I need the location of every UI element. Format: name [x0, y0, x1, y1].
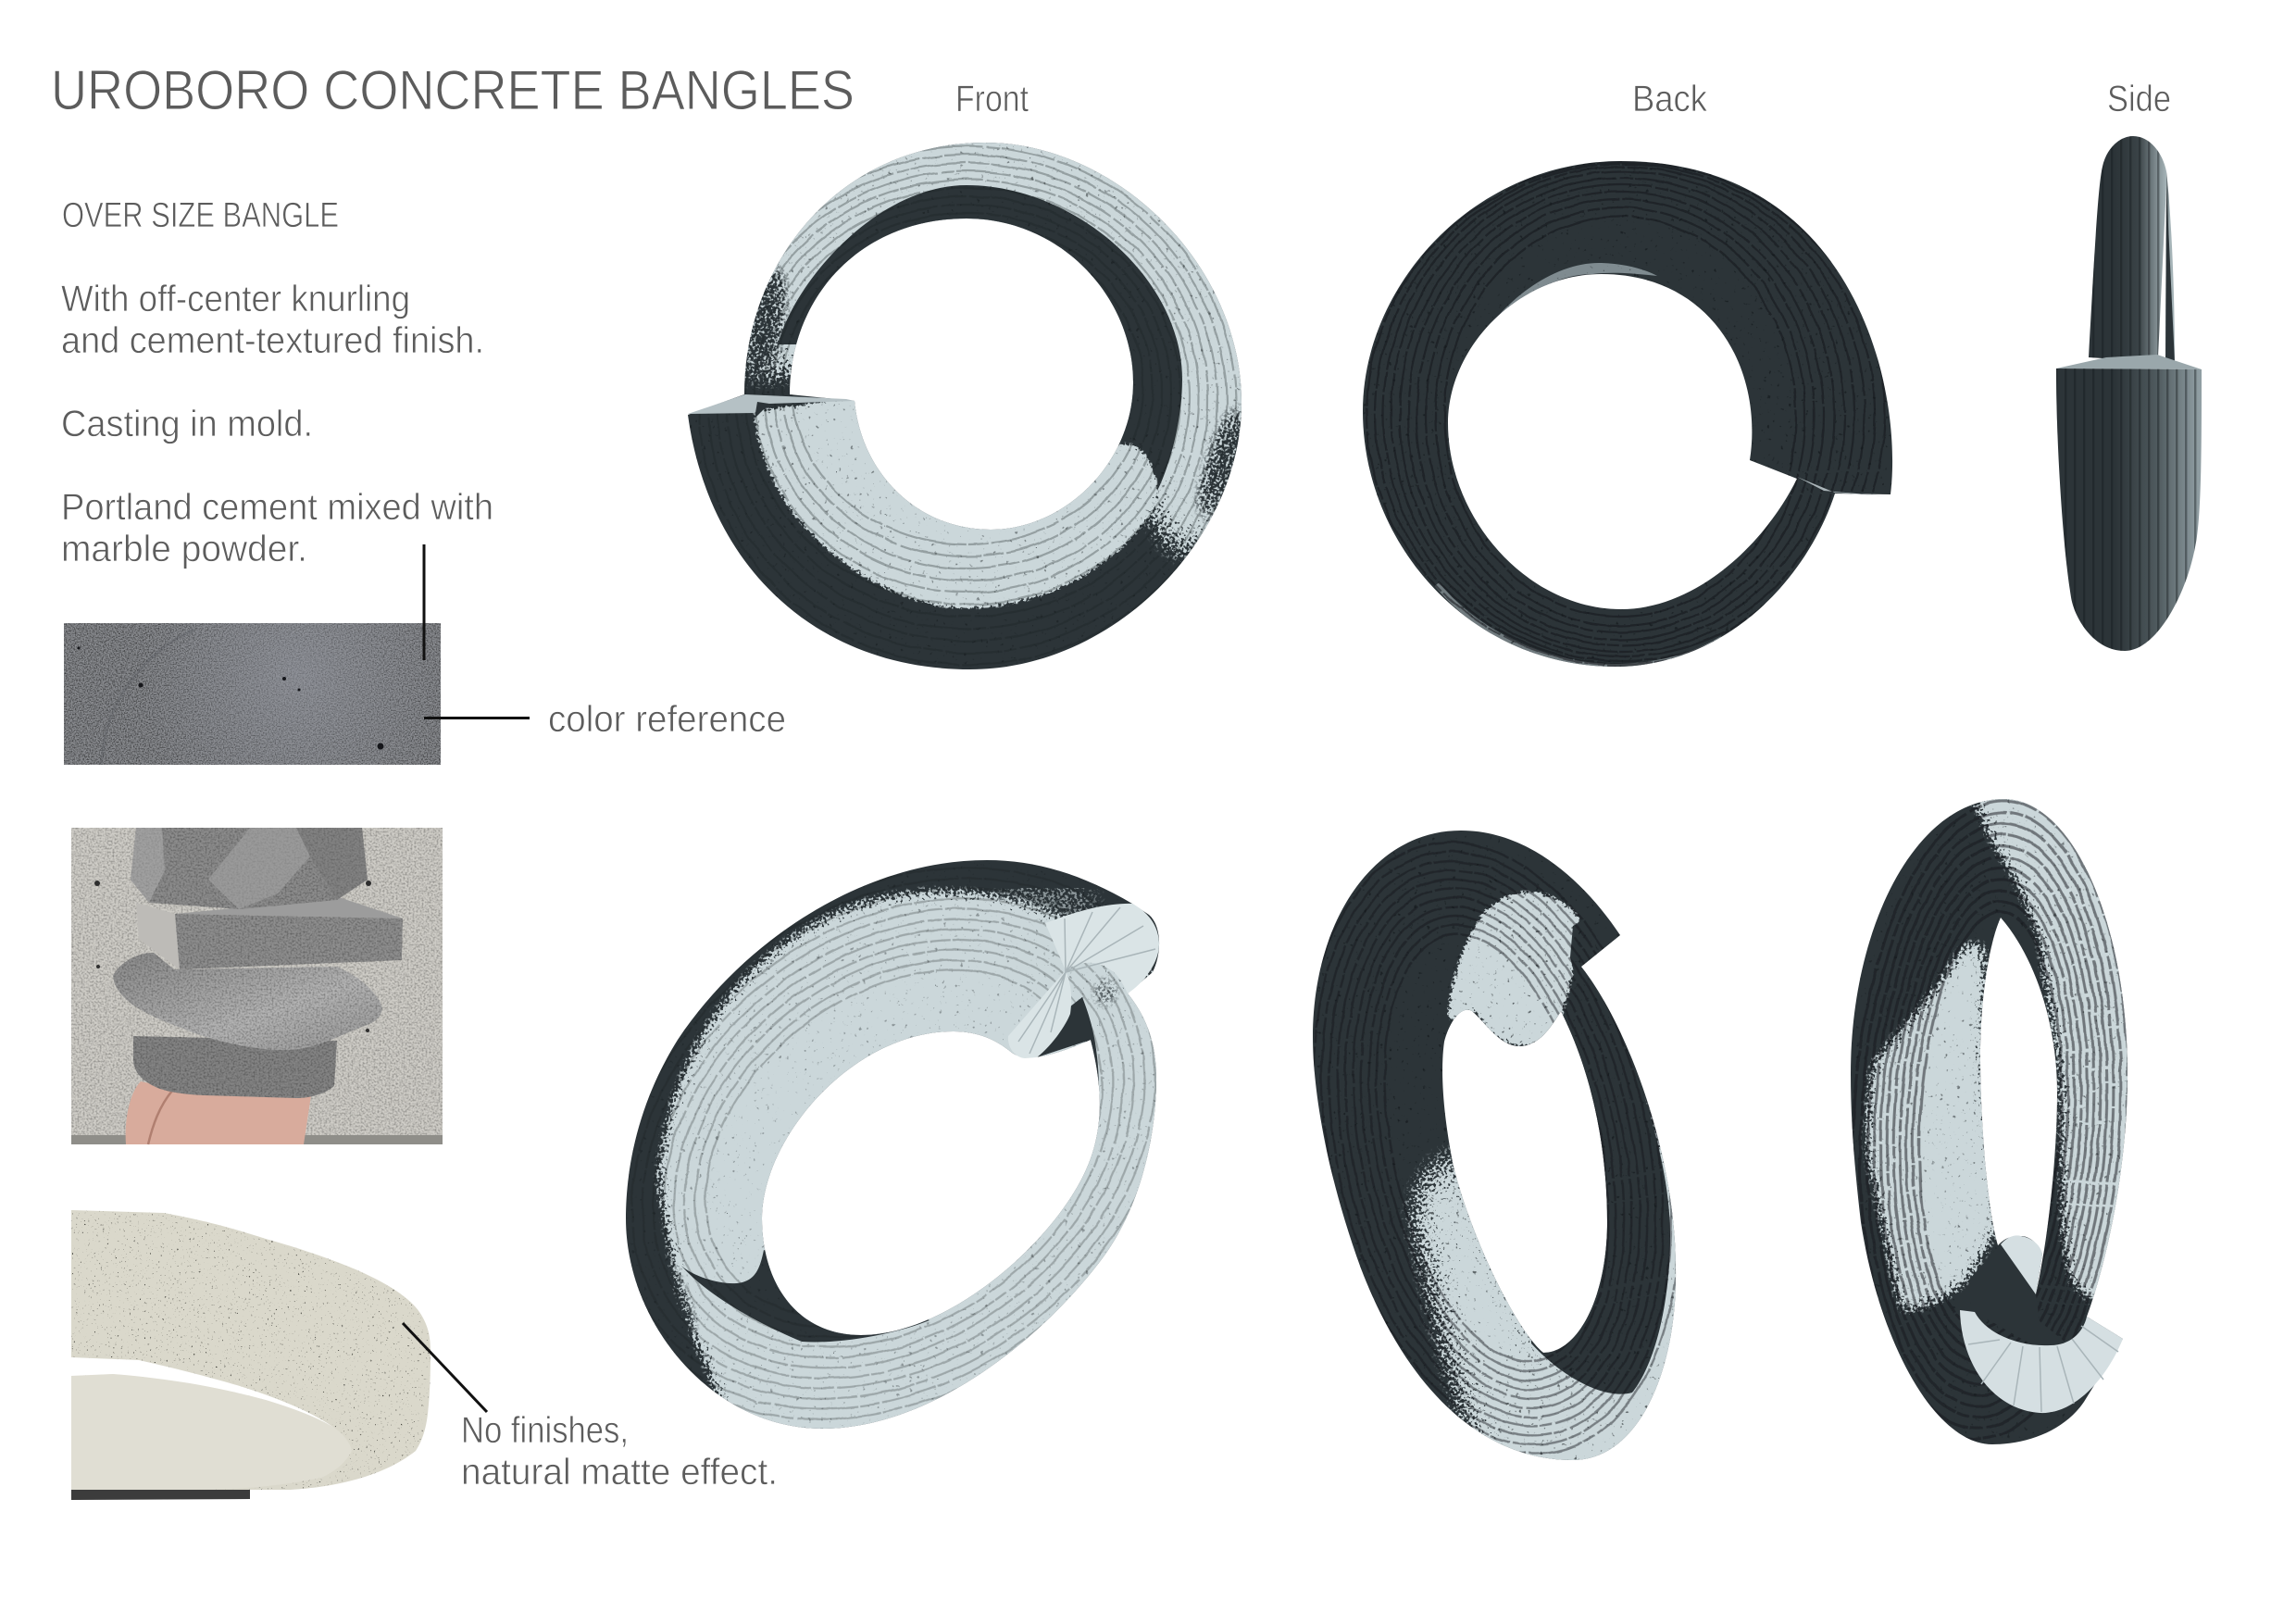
wall pores: [94, 881, 371, 1032]
soft mottling: [64, 623, 441, 765]
mold arc: [102, 630, 194, 765]
fan lines: [1018, 907, 1155, 1054]
fan cap upper: [1045, 904, 1159, 993]
right dark band: [2165, 185, 2175, 363]
fan lines: [1968, 1326, 2118, 1412]
material line 1: Portland cement mixed with: [61, 487, 493, 528]
cap notch: [755, 402, 769, 418]
bangle: perspective 1: [626, 860, 1159, 1429]
square bangle top: [175, 898, 403, 918]
hand: [126, 1081, 311, 1144]
bangle: front view: [688, 143, 1242, 669]
material line 2: marble powder.: [61, 529, 307, 569]
pores: [78, 646, 383, 750]
photo: concrete bangles on wrist: [71, 828, 443, 1144]
fin knurling: [2089, 136, 2175, 363]
faceted bangle facets: [131, 828, 368, 909]
lower bangle: [133, 1036, 337, 1098]
square bangle front: [175, 914, 403, 969]
vertical knurling: [2056, 369, 2202, 651]
text block: product description: [61, 196, 493, 569]
square bangle side: [136, 903, 180, 969]
fan cap upper: [2001, 1235, 2042, 1294]
color reference swatch: [64, 544, 786, 765]
Front label: Front: [955, 79, 1029, 119]
black base: [71, 1489, 250, 1500]
leader line horizontal: [424, 717, 530, 719]
outer surface: [71, 1210, 430, 1490]
photo: natural matte bangle: [71, 1210, 778, 1500]
title: UROBORO CONCRETE BANGLES: [51, 59, 855, 121]
dark inner edge: [1081, 997, 1099, 1086]
bangle: back view: [1363, 161, 1892, 667]
dark wedge: [1037, 997, 1091, 1057]
inner surface: [71, 1374, 352, 1490]
concrete texture: [64, 623, 441, 765]
cut cap: [688, 394, 855, 414]
Side label: Side: [2107, 79, 2171, 119]
Back label: Back: [1632, 79, 1708, 119]
gap under band: [71, 1357, 334, 1428]
leader line: [403, 1323, 487, 1412]
bangle: perspective 3: [1851, 799, 2128, 1444]
fan cap lower: [1008, 970, 1071, 1058]
lower body: [2056, 369, 2202, 651]
slit: [2158, 185, 2166, 357]
bangle: perspective 2: [1313, 831, 1676, 1460]
leader line vertical: [422, 544, 426, 660]
thumb crease: [148, 1091, 172, 1144]
label: no finishes: No finishes,: [461, 1410, 629, 1451]
casting: Casting in mold.: [61, 404, 313, 444]
cut cap: [1797, 477, 1889, 496]
saucer bangle: [113, 953, 382, 1050]
cut cap: [2056, 355, 2202, 369]
label: natural matte: natural matte effect.: [461, 1452, 778, 1493]
fan cap lower: [1960, 1310, 2123, 1413]
dark fan: [1968, 1252, 2065, 1345]
view labels: [955, 79, 2171, 119]
upper ring edge: [2089, 136, 2175, 363]
finish line 2: and cement-textured finish.: [61, 320, 484, 361]
bangle: side view: [2056, 136, 2202, 651]
finish line 1: With off-center knurling: [61, 279, 410, 319]
faceted bangle: [131, 828, 368, 909]
wall: [71, 828, 443, 1144]
subtitle: OVER SIZE BANGLE: [62, 196, 339, 235]
color reference label: color reference: [548, 699, 786, 740]
floor strip: [71, 1135, 443, 1144]
